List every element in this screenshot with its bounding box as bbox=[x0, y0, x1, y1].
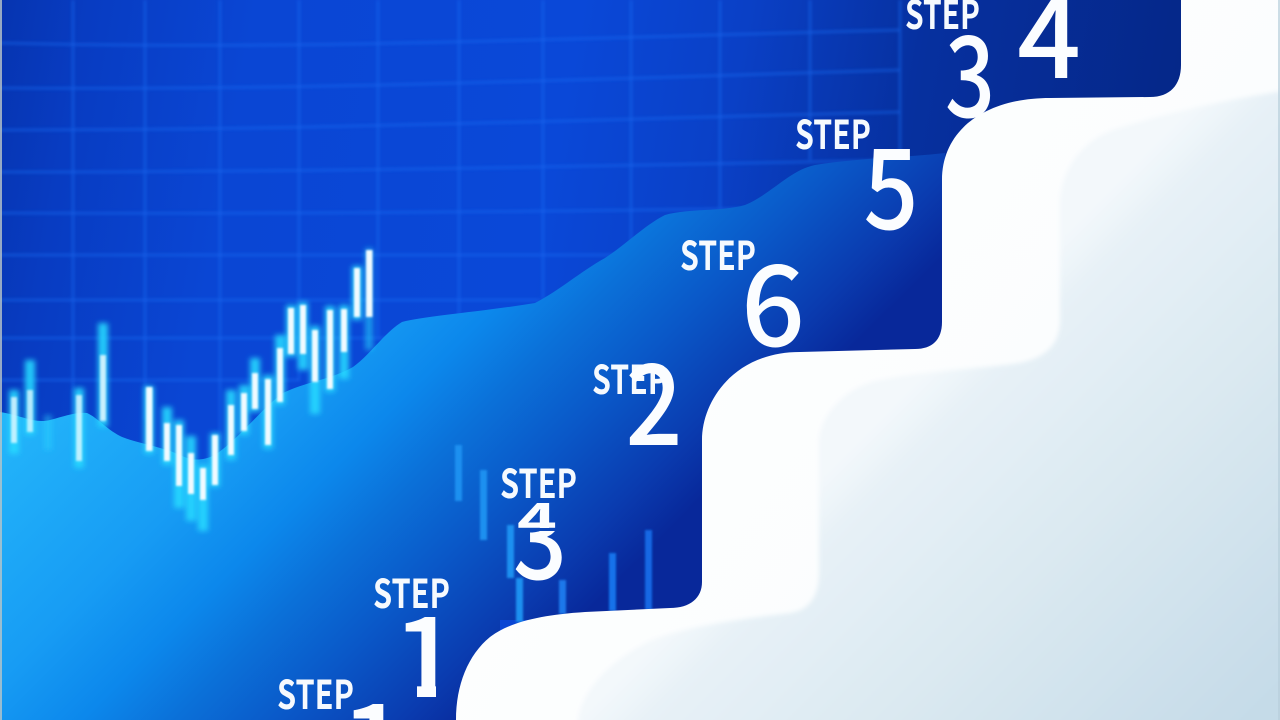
label: step 1 lower bbox=[278, 679, 384, 720]
label: step 5: STEP bbox=[795, 103, 871, 161]
label: step 3 lower, malformed numeral bbox=[501, 468, 576, 580]
label: step 1: STEP bbox=[373, 562, 450, 620]
label: step 6: 6 bbox=[741, 217, 805, 379]
label: step 2: STEP bbox=[592, 348, 668, 406]
right edge strip bbox=[1278, 0, 1280, 720]
label: step 5: 5 bbox=[864, 100, 918, 262]
label: step 6 bbox=[680, 217, 805, 379]
label: step 3 lower, malformed numeral: 4 bbox=[517, 484, 557, 550]
label: step 6: STEP bbox=[680, 224, 756, 282]
label: step 2: 2 bbox=[626, 316, 682, 478]
label: step 5 bbox=[795, 100, 918, 262]
candlesticks: bright bodies bbox=[11, 250, 372, 500]
chart grid bbox=[0, 0, 900, 440]
label: step 3 lower, malformed numeral: STEP bbox=[500, 452, 577, 510]
label: step 2 bbox=[592, 316, 682, 478]
label: step 1 lower: STEP bbox=[277, 663, 354, 720]
area chart: rising light blue mountain bbox=[0, 153, 945, 720]
label: step 3 lower, malformed numeral: 3 bbox=[513, 450, 567, 612]
candlesticks: faint lower right bbox=[455, 445, 652, 622]
label: step 3 bbox=[905, 0, 995, 150]
candlesticks: glow bbox=[9, 248, 373, 531]
staircase: shaded inner bbox=[578, 90, 1280, 720]
left edge strip bbox=[0, 0, 2, 720]
staircase: white outer bbox=[456, 0, 1280, 720]
label: step 1 bbox=[374, 578, 449, 697]
